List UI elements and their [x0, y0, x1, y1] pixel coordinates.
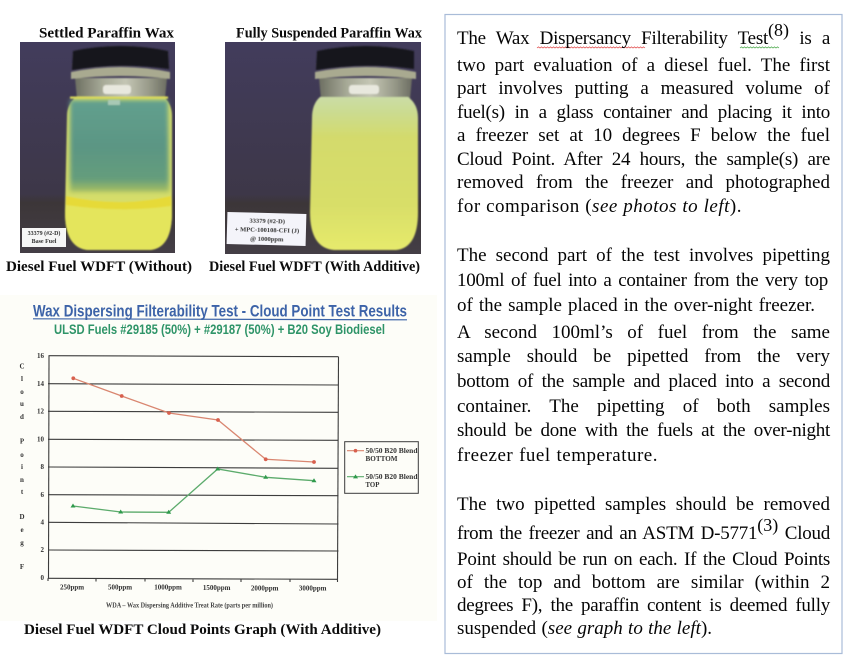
text panel border — [445, 14, 842, 654]
y axis title: C — [19, 362, 25, 370]
y axis title: e — [20, 526, 24, 534]
x axis title: WDA – Wax Dispersing Additive Treat Rate (parts per million) — [106, 602, 274, 610]
x axis tick labels: 3000ppm — [299, 584, 327, 592]
caption: without additive: Diesel Fuel WDFT (Without) — [6, 259, 192, 275]
text block: first paragraph: two part evaluation of a diesel fuel. The first — [457, 55, 830, 76]
text block: third paragraph: suspended (see graph to the left). — [457, 618, 712, 639]
y axis title: g — [20, 539, 24, 547]
text block: second paragraph: should be done with the fuels at the over-night — [457, 420, 830, 441]
text block: third paragraph: degrees F), the paraffin content is deemed fully — [457, 595, 830, 616]
x axis tick labels: 1000ppm — [154, 584, 182, 592]
text block: third paragraph — [457, 494, 830, 639]
y axis tick labels: 12 — [37, 408, 44, 416]
y axis tick labels: 4 — [40, 518, 44, 526]
series: top — [70, 466, 316, 514]
spell-check squiggle: red — [537, 47, 645, 48]
text block: second paragraph — [457, 245, 830, 466]
text block: third paragraph: Point should be run on each. If the Cloud Points — [457, 549, 830, 570]
y axis title: d — [20, 413, 24, 421]
plot grid — [48, 356, 338, 582]
caption: cloud points graph: Diesel Fuel WDFT Cloud Points Graph (With Additive) — [24, 622, 381, 638]
chart subtitle: ULSD Fuels #29185 (50%) + #29187 (50%) + B20 Soy Biodiesel — [54, 321, 385, 337]
text block: first paragraph: fuel(s) in a glass container and placing it into — [457, 102, 830, 123]
heading: settled paraffin wax: Settled Paraffin Wax — [39, 26, 175, 42]
photo: jar with suspended wax — [225, 42, 421, 254]
line chart: cloud point vs treat rate — [19, 352, 418, 610]
text block: first paragraph: a freezer set at 10 degrees F below the fuel — [457, 125, 830, 146]
label: additive sample: + MPC-100108-CFI (J) — [235, 226, 299, 235]
text block: first paragraph: for comparison (see photos to left). — [457, 196, 742, 217]
photo: jar with settled wax — [20, 42, 175, 253]
text block: second paragraph: container. The pipetting of both samples — [457, 396, 830, 417]
chart title: Wax Dispersing Filterability Test - Cloud Point Test Results — [33, 302, 407, 320]
legend: 50/50 B20 Blend — [366, 448, 418, 455]
text block: third paragraph: of the top and bottom are similar (within 2 — [457, 572, 830, 593]
heading: fully suspended paraffin wax: Fully Suspended Paraffin Wax — [236, 26, 423, 42]
text block: second paragraph: The second part of the test involves pipetting — [457, 245, 830, 266]
y axis tick labels: 14 — [37, 380, 44, 388]
y axis title: o — [20, 388, 24, 396]
text block: first paragraph — [457, 20, 830, 217]
y axis tick labels: 16 — [37, 352, 44, 360]
y axis tick labels: 0 — [40, 574, 44, 582]
x axis tick labels: 1500ppm — [203, 584, 231, 592]
y axis tick labels: 6 — [40, 491, 44, 499]
label: base fuel: Base Fuel — [32, 239, 57, 245]
series: bottom — [71, 376, 316, 464]
label: additive sample: @ 1000ppm — [250, 236, 284, 243]
text block: third paragraph: The two pipetted samples should be removed — [457, 494, 830, 515]
text block: third paragraph: from the freezer and an ASTM D-5771(3) Cloud — [457, 515, 830, 544]
y axis title: i — [21, 463, 23, 471]
y axis tick labels: 2 — [40, 546, 44, 554]
y axis title: D — [19, 513, 25, 521]
x axis tick labels: 500ppm — [108, 584, 132, 592]
text block: second paragraph: A second 100ml’s of fuel from the same — [457, 322, 830, 343]
label: additive sample — [227, 212, 306, 246]
text block: second paragraph: freezer fuel temperature. — [457, 445, 658, 466]
chart background — [0, 295, 437, 621]
text block: second paragraph: of the sample placed in the over-night freezer. — [457, 295, 815, 316]
y axis tick labels: 8 — [40, 463, 44, 471]
caption: with additive: Diesel Fuel WDFT (With Additive) — [209, 259, 420, 275]
text block: first paragraph: The Wax Dispersancy Filterability Test(8) is a — [457, 20, 830, 49]
y axis title: F — [20, 563, 24, 571]
y axis title: o — [20, 451, 24, 459]
x axis tick labels — [60, 584, 327, 592]
y axis tick labels — [37, 352, 44, 582]
spell-check squiggle: green — [740, 47, 779, 48]
y axis tick labels: 10 — [37, 436, 44, 444]
y axis title: u — [20, 400, 24, 408]
y axis title — [19, 362, 25, 571]
text block: second paragraph: sample should be pipetted from the very — [457, 346, 830, 367]
x axis tick labels: 250ppm — [60, 584, 84, 592]
label: base fuel — [22, 228, 66, 247]
y axis title: l — [21, 375, 23, 383]
text block: first paragraph: Cloud Point. After 24 hours, the sample(s) are — [457, 149, 830, 170]
y axis title: n — [20, 476, 24, 484]
legend — [345, 442, 418, 493]
legend: BOTTOM — [366, 456, 398, 463]
y axis title: t — [21, 488, 24, 496]
legend: TOP — [366, 482, 379, 489]
legend: 50/50 B20 Blend — [366, 474, 418, 481]
text block: second paragraph: 100ml of fuel into a container from the very top — [457, 270, 828, 291]
x axis tick labels: 2000ppm — [251, 584, 279, 592]
y axis title: P — [20, 438, 25, 446]
label: base fuel: 33379 (#2-D) — [28, 230, 60, 237]
text block: first paragraph: removed from the freezer and photographed — [457, 172, 830, 193]
label: additive sample: 33379 (#2-D) — [249, 218, 285, 225]
text block: second paragraph: bottom of the sample and placed into a second — [457, 371, 830, 392]
text block: first paragraph: part involves putting a measured volume of — [457, 78, 830, 99]
